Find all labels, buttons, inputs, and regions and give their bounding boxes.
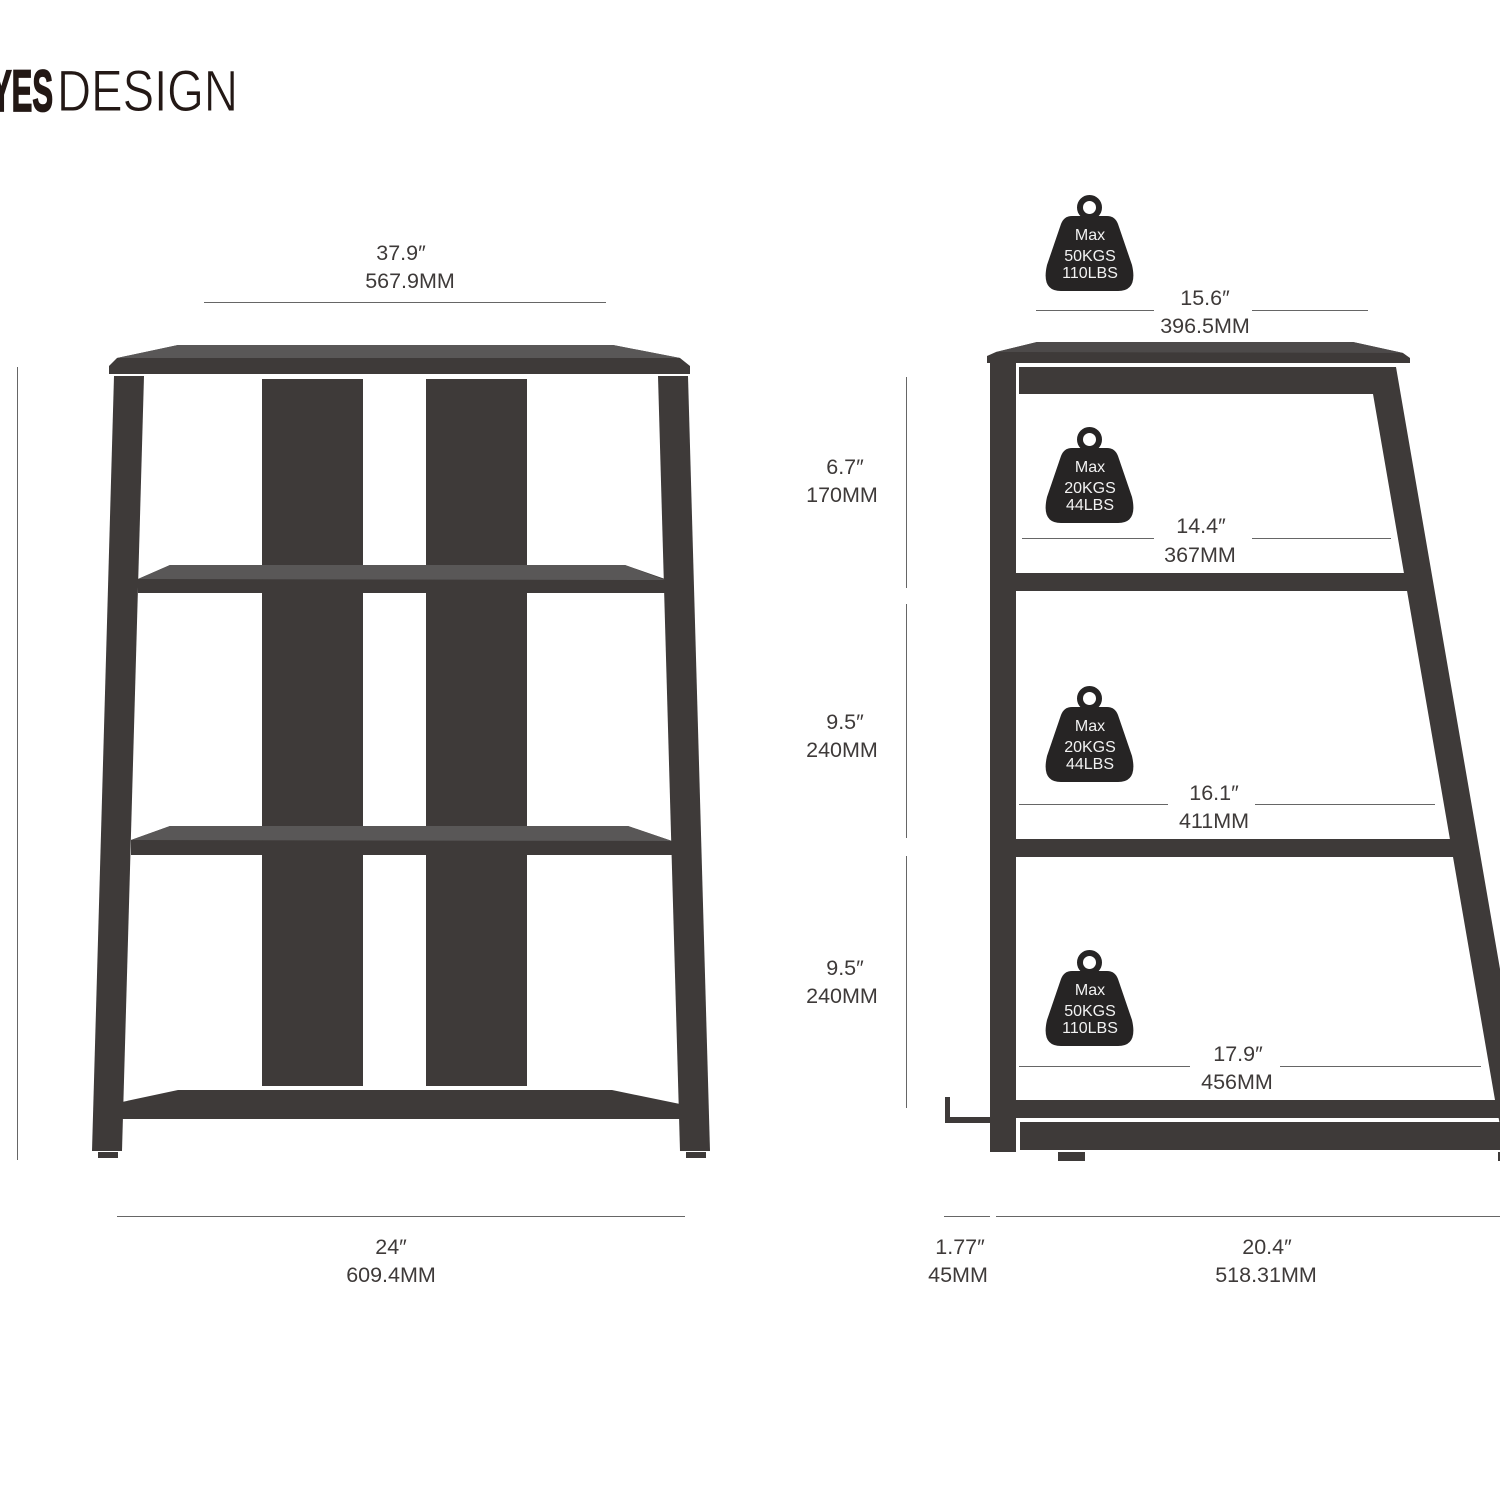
dimension: lower shelf height: 9.5″ bbox=[826, 956, 864, 980]
dimension: lower shelf height: 240MM bbox=[806, 984, 878, 1008]
front view: legs bbox=[92, 376, 710, 1158]
side view: rear post bbox=[990, 363, 1016, 1152]
icon: weight max 50KGS top shelf: Max bbox=[1075, 227, 1105, 244]
dimension: upper shelf height: 6.7″ bbox=[826, 455, 864, 479]
dimension: bottom shelf depth: 17.9″ bbox=[1213, 1042, 1263, 1066]
front view: top shelf bbox=[109, 345, 690, 374]
dimension: third shelf depth: 411MM bbox=[1179, 809, 1249, 833]
side view: feet bbox=[1058, 1152, 1500, 1161]
front view of shelf bbox=[92, 345, 710, 1158]
dimension: second shelf depth bbox=[1164, 514, 1236, 567]
dimension: top shelf depth: 15.6″ bbox=[1180, 286, 1230, 310]
icon: weight max 20KGS third shelf bbox=[1046, 689, 1133, 782]
dimension lines bbox=[18, 302, 1500, 1216]
logo: YES DESIGN: DESIGN bbox=[57, 59, 238, 124]
icon: weight max 20KGS third shelf: 44LBS bbox=[1066, 756, 1114, 773]
dimension: base depth: 518.31MM bbox=[1215, 1263, 1317, 1287]
icon: weight max 20KGS second shelf: Max bbox=[1075, 459, 1105, 476]
dimension: top width bbox=[365, 241, 455, 293]
dimension: base depth bbox=[1215, 1235, 1317, 1287]
icon: weight max 50KGS top shelf bbox=[1046, 198, 1133, 291]
side view: top bar and slanted leg bbox=[1019, 367, 1500, 1125]
dimension: second shelf depth: 367MM bbox=[1164, 543, 1236, 567]
dimension: base depth: 20.4″ bbox=[1242, 1235, 1292, 1259]
dimension: top shelf depth: 396.5MM bbox=[1160, 314, 1250, 338]
dimension: bracket depth: 45MM bbox=[928, 1263, 988, 1287]
side view: top shelf bbox=[987, 342, 1410, 363]
dimension: bottom width: 24″ bbox=[375, 1235, 407, 1259]
icon: weight max 20KGS third shelf: Max bbox=[1075, 718, 1105, 735]
icon: weight max 50KGS bottom shelf bbox=[1046, 953, 1133, 1046]
icon: weight max 50KGS top shelf: 110LBS bbox=[1062, 265, 1118, 282]
icon: weight max 20KGS second shelf bbox=[1046, 430, 1133, 523]
logo: YES DESIGN bbox=[0, 59, 238, 124]
side view: cross bars bbox=[1016, 573, 1500, 1150]
dimension: bottom shelf depth: 456MM bbox=[1201, 1070, 1273, 1094]
dimension: middle shelf height: 240MM bbox=[806, 738, 878, 762]
dimension: second shelf depth: 14.4″ bbox=[1176, 514, 1226, 538]
icon: weight max 50KGS bottom shelf: 50KGS bbox=[1064, 1003, 1116, 1020]
dimension: bracket depth bbox=[928, 1235, 988, 1287]
icon: weight max 20KGS second shelf: 20KGS bbox=[1064, 480, 1116, 497]
dimension: upper shelf height: 170MM bbox=[806, 483, 878, 507]
dimension: bottom shelf depth bbox=[1201, 1042, 1273, 1094]
dimension: bottom width bbox=[346, 1235, 436, 1287]
dimension: third shelf depth bbox=[1179, 781, 1249, 833]
icon: weight max 50KGS top shelf: 50KGS bbox=[1064, 248, 1116, 265]
icon: weight max 50KGS bottom shelf: 110LBS bbox=[1062, 1020, 1118, 1037]
dimension: top shelf depth bbox=[1160, 286, 1250, 338]
icon: weight max 20KGS third shelf: 20KGS bbox=[1064, 739, 1116, 756]
side view: L bracket bbox=[945, 1097, 990, 1123]
dimension: top width: 567.9MM bbox=[365, 269, 455, 293]
dimension: middle shelf height bbox=[806, 710, 878, 762]
front view: third shelf bbox=[131, 826, 672, 855]
dimension: bottom width: 609.4MM bbox=[346, 1263, 436, 1287]
dimension: middle shelf height: 9.5″ bbox=[826, 710, 864, 734]
dimension: upper shelf height bbox=[806, 455, 878, 507]
dimension: top width: 37.9″ bbox=[376, 241, 426, 265]
side view of shelf bbox=[945, 342, 1500, 1161]
front view: second shelf bbox=[138, 565, 665, 593]
icon: weight max 20KGS second shelf: 44LBS bbox=[1066, 497, 1114, 514]
icon: weight max 50KGS bottom shelf: Max bbox=[1075, 982, 1105, 999]
dimension: third shelf depth: 16.1″ bbox=[1189, 781, 1239, 805]
dimension: lower shelf height bbox=[806, 956, 878, 1008]
dimension: bracket depth: 1.77″ bbox=[935, 1235, 985, 1259]
front view: back panels bbox=[262, 379, 527, 1086]
front view: bottom shelf bbox=[122, 1090, 680, 1119]
